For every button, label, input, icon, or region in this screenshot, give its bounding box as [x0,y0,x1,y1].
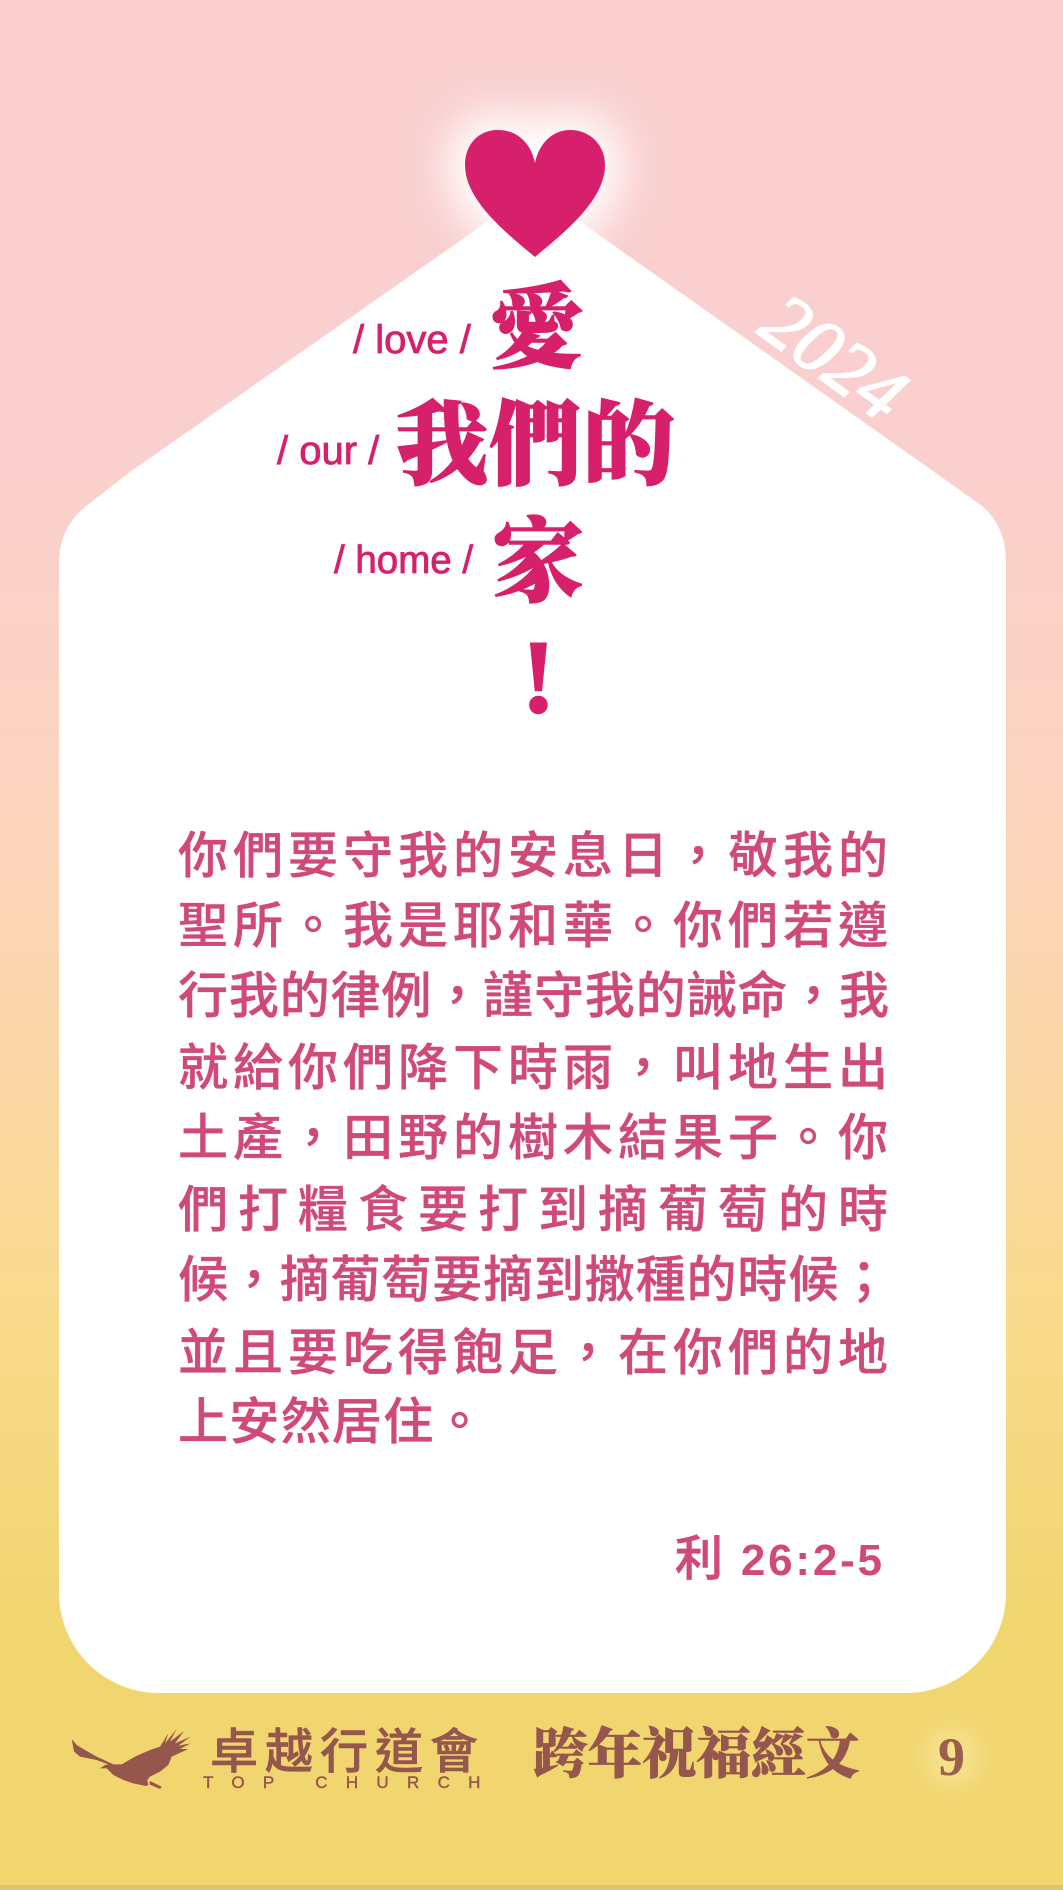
house shape panel with heart and year: 2024 [746,276,923,438]
body text: scripture: 你們要守我的安息日，敬我的 [178,828,893,884]
body text: scripture: 候，摘葡萄要摘到撒種的時候； [178,1252,890,1308]
body text: scripture: 行我的律例，謹守我的誡命，我 [178,968,890,1024]
title: 愛: 愛 [491,278,583,380]
body text: scripture: 聖所。我是耶和華。你們若遵 [178,898,893,954]
page number: 9 [938,1727,965,1787]
body text: scripture: 就給你們降下時雨，叫地生出 [178,1040,893,1096]
footer logo: english name: TOP CHURCH [203,1773,499,1792]
footer title: 跨年祝福經文 [533,1724,860,1785]
label: love: / love / [353,318,471,362]
footer logo: eagle icon [72,1729,190,1789]
label: our: / our / [277,429,379,473]
label: home: / home / [334,539,473,582]
title: exclamation mark: ! [521,618,556,735]
body text: scripture [178,828,898,1450]
body text: scripture: 上安然居住。 [178,1394,486,1450]
body text: scripture: 並且要吃得飽足，在你們的地 [178,1325,893,1381]
body text: scripture: 們打糧食要打到摘葡萄的時 [178,1182,898,1238]
body text: scripture: 土產，田野的樹木結果子。你 [178,1110,893,1166]
footer logo: church name: 卓越行道會 [210,1726,485,1779]
page number glow [925,1728,979,1786]
title: 家: 家 [492,512,584,614]
bottom edge strip [0,1885,1063,1890]
scripture reference: 利 26:2-5 [675,1533,885,1586]
title: 我們的: 我們的 [396,395,677,497]
